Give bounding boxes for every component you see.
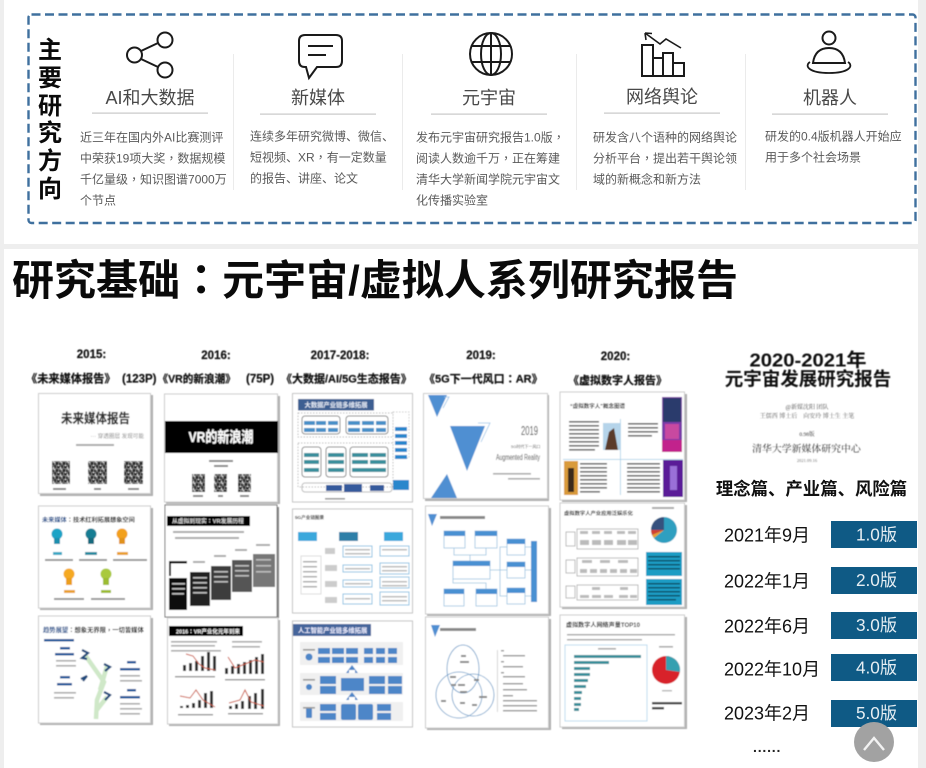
column: online public opinion: 分析平台，提出若干舆论领 [593, 150, 737, 166]
panel: lower white background [4, 249, 918, 768]
report authors and publisher [752, 403, 862, 463]
icon: person on ring [808, 32, 850, 73]
thumbnail: 5G industry chain: 5G产业链图景 [295, 514, 325, 521]
thumbnail: digital human top 10 [560, 615, 687, 729]
icon: bar chart with arrow [642, 33, 684, 76]
heading: main research directions: 研 [38, 93, 62, 120]
thumbnail: 5G AR cover: 5G时代下一风口 [511, 443, 540, 449]
column: new media: 新媒体 [291, 88, 345, 108]
icon: speech bubble [299, 35, 342, 78]
report authors and publisher: 0.98版 [799, 430, 815, 438]
column: metaverse: 清华大学新闻学院元宇宙文 [416, 172, 560, 186]
column: metaverse [416, 33, 565, 208]
column: AI and big data: 个节点 [80, 194, 116, 208]
thumbnail: future media technology bulbs: 未来媒体：技术红利拓展想象空间 [42, 516, 135, 524]
thumbnail: 5G AR cover: Augmented Reality [496, 453, 540, 462]
thumbnail: 5G AR cover: 2019 [521, 424, 538, 438]
column labels: years and report names: 《虚拟数字人报告》 [568, 373, 667, 387]
heading: main research directions: 方 [38, 147, 62, 175]
column labels: years and report names: 2015: [77, 349, 106, 361]
column: new media: 短视频、XR，有一定数量 [250, 150, 387, 164]
column labels: years and report names: 2019: [466, 350, 496, 362]
version timeline [724, 521, 917, 755]
thumbnail: 5G AR cover [424, 394, 549, 501]
thumbnail: big data industry chain [292, 394, 412, 502]
column: AI and big data: 近三年在国内外AI比赛测评 [80, 130, 223, 144]
column: metaverse: 化传播实验室 [416, 192, 488, 208]
thumbnail: future media report cover: 未来媒体报告 [61, 410, 130, 426]
version timeline: 2022年10月 [724, 660, 820, 680]
icon: globe [470, 33, 512, 75]
column: AI and big data: 中荣获19项大奖，数据规模 [80, 150, 225, 166]
column: robots: 机器人 [803, 88, 857, 108]
thumbnail: future media report cover [38, 394, 153, 496]
thumbnail: virtual digital human concept map [560, 392, 687, 502]
panel: metaverse development report [716, 350, 917, 755]
report cover title [725, 350, 891, 390]
thumbnail: digital human top 10: 虚拟数字人网络声量TOP10 [566, 621, 641, 629]
report authors and publisher: 2021.09.16 [797, 458, 818, 463]
icon: share nodes [127, 32, 172, 78]
version timeline: 2022年1月 [724, 572, 810, 592]
thumbnail: trend outlook tree: 趋势展望：想象无界限，一切皆媒体 [43, 625, 144, 634]
version timeline: 4.0版 [856, 658, 897, 678]
column: AI and big data [80, 32, 227, 208]
panel: main research directions [28, 14, 916, 223]
column: online public opinion: 研发含八个语种的网络舆论 [593, 130, 737, 144]
report cover title: 2020-2021年 [750, 350, 866, 370]
icon: back to top button [854, 722, 894, 762]
column: online public opinion [593, 33, 737, 186]
column: metaverse: 阅读人数逾千万，正在筹建 [416, 150, 560, 166]
version timeline: 2023年2月 [724, 704, 810, 724]
version timeline: 2.0版 [856, 570, 897, 590]
column: metaverse: 发布元宇宙研究报告1.0版， [416, 130, 565, 144]
thumbnail: trend outlook tree [38, 616, 153, 725]
report authors and publisher: 王儒西 博士后 向安玲 博士生 主笔 [760, 412, 854, 420]
thumbnail: big data industry chain: 大数据产业链多维拓展 [305, 400, 368, 409]
thumbnail: VR development history: 从虚拟到现实：VR发展历程 [172, 517, 244, 525]
thumbnail: VR industrialization charts [168, 618, 280, 726]
column: robots: 研发的0.4版机器人开始应 [765, 128, 902, 144]
thumbnail: AI industry chain [292, 621, 412, 727]
column labels: years and report names: 2017-2018: [311, 350, 369, 362]
column: metaverse: 元宇宙 [462, 88, 516, 108]
thumbnail: AI industry chain: 人工智能产业链多维拓展 [298, 626, 368, 634]
thumbnail: Venn diagram [426, 617, 551, 730]
column: new media: 连续多年研究微博、微信、 [250, 128, 394, 144]
column: robots: 用于多个社会场景 [765, 150, 861, 164]
thumbnail: VR industrialization charts: 2016：VR产业化元年到来 [176, 628, 240, 636]
thumbnail: industry chain flowchart [426, 506, 551, 616]
column: online public opinion: 网络舆论 [626, 87, 698, 107]
heading: main research directions: 要 [38, 65, 62, 92]
column: new media: 的报告、讲座、论文 [250, 170, 358, 186]
column labels: years and report names [26, 349, 667, 387]
report chapters: 理念篇、产业篇、风险篇 [716, 479, 907, 499]
thumbnail: VR new wave cover [164, 394, 280, 504]
column labels: years and report names: 《5G下一代风口：AR》 [424, 372, 543, 386]
heading: main research directions: 向 [38, 176, 62, 203]
thumbnail: 5G industry chain [292, 509, 412, 613]
thumbnail: virtual digital human concept map: “虚拟数字人”概念图谱 [570, 402, 626, 410]
thumbnail: digital human applications: 虚拟数字人产业应用泛娱乐化 [564, 509, 634, 517]
column: online public opinion: 域的新概念和新方法 [593, 172, 701, 186]
thumbnail: VR development history [165, 505, 279, 618]
heading: main research directions [38, 37, 62, 203]
column labels: years and report names: 《未来媒体报告》 [26, 372, 116, 386]
version timeline: 2022年6月 [724, 616, 810, 636]
heading: main research directions: 究 [38, 120, 62, 147]
title: research foundation: 研究基础：元宇宙/虚拟人系列研究报告 [12, 257, 738, 304]
version timeline: 5.0版 [856, 703, 897, 723]
thumbnail: future media report cover: ··· 穿透圈层 发现可能 [91, 432, 144, 440]
panel: top white background [4, 0, 918, 244]
column: AI and big data: AI和大数据 [105, 88, 195, 108]
column labels: years and report names: 《VR的新浪潮》 [158, 372, 236, 386]
version timeline: 1.0版 [856, 524, 897, 544]
report authors and publisher: @新媒沈阳 团队 [785, 403, 829, 411]
thumbnail: future media technology bulbs [38, 506, 153, 610]
heading: main research directions: 主 [38, 37, 62, 64]
thumbnail: VR new wave cover: VR的新浪潮 [189, 428, 253, 445]
column: robots [765, 32, 902, 164]
column labels: years and report names: 《大数据/AI/5G生态报告》 [281, 372, 412, 386]
column labels: years and report names: 2020: [601, 351, 630, 363]
report cover title: 元宇宙发展研究报告 [725, 368, 891, 390]
thumbnail: digital human applications [560, 503, 687, 609]
version timeline: 2021年9月 [724, 526, 810, 546]
version timeline: 3.0版 [856, 615, 897, 635]
column: new media [250, 35, 394, 186]
column labels: years and report names: 2016: [201, 350, 231, 362]
report authors and publisher: 清华大学新媒体研究中心 [752, 442, 862, 455]
version timeline: ...... [753, 739, 781, 755]
column labels: years and report names: (123P) [122, 374, 157, 386]
column labels: years and report names: (75P) [246, 374, 274, 386]
column: AI and big data: 千亿量级，知识图谱7000万 [80, 172, 227, 186]
